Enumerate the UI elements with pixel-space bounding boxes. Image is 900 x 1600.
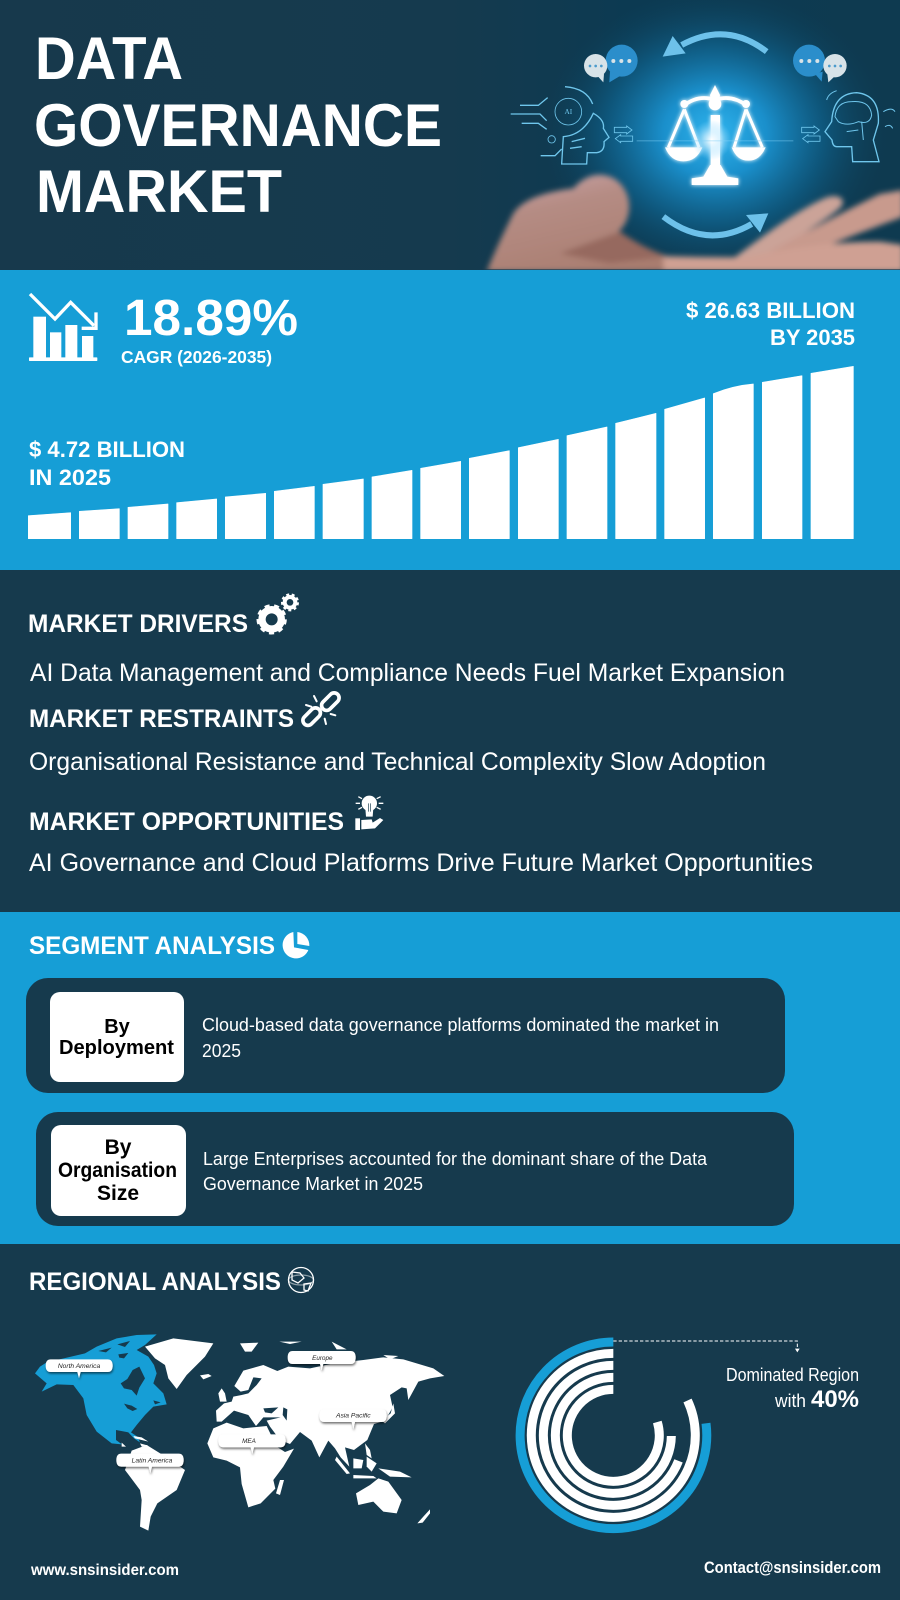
title (34, 25, 442, 225)
card: by organisation size (36, 1112, 794, 1226)
chat bubbles (584, 45, 847, 82)
icon: globe (288, 1268, 314, 1292)
description: Cloud-based data governance platforms dominated the market in (202, 1015, 719, 1035)
label: MEA (218, 1434, 286, 1454)
dominated region callout (726, 1365, 859, 1413)
footer website: www.snsinsider.com (30, 1562, 179, 1579)
Australia (356, 1478, 402, 1513)
scales icon (665, 85, 766, 185)
label box: By (104, 1016, 131, 1038)
islands (122, 1342, 430, 1523)
opportunity text: AI Governance and Cloud Platforms Drive Future Market Opportunities (29, 849, 813, 877)
label box: Deployment (59, 1037, 174, 1059)
description (202, 1015, 719, 1061)
description: Governance Market in 2025 (203, 1174, 423, 1194)
hand (487, 175, 900, 272)
icon: broken chain link (301, 691, 341, 728)
left AI head line art (511, 87, 633, 164)
panel: regional analysis (0, 1244, 900, 1600)
panel: header (0, 0, 900, 280)
label: Asia Pacific (319, 1409, 387, 1429)
end value (686, 298, 855, 350)
icon: bar chart with trend arrow (29, 294, 97, 361)
world map (35, 1334, 444, 1531)
description: 2025 (202, 1041, 241, 1061)
CAGR label: CAGR (2026-2035) (121, 347, 272, 367)
dashed leader line (613, 1341, 800, 1352)
label box: Organisation (58, 1159, 177, 1182)
heading: market drivers: MARKET DRIVERS (28, 610, 248, 638)
radial bar chart (520, 1341, 800, 1529)
card: by deployment (26, 978, 785, 1093)
start value (29, 437, 185, 490)
end value: $ 26.63 BILLION (686, 298, 855, 323)
panel: segment analysis (0, 912, 900, 1244)
heading: market opportunities: MARKET OPPORTUNITIES (29, 808, 344, 836)
Eurasia (216, 1357, 444, 1467)
heading: regional analysis: REGIONAL ANALYSIS (29, 1268, 281, 1296)
Africa (207, 1423, 294, 1507)
label: Asia Pacific: Asia Pacific (335, 1413, 371, 1420)
heading: market restraints: MARKET RESTRAINTS (29, 705, 294, 733)
bar chart (28, 366, 853, 539)
label box (51, 1125, 186, 1216)
icon: pie chart (283, 932, 309, 958)
title: GOVERNANCE (34, 92, 442, 159)
title: MARKET (36, 158, 282, 225)
South America (125, 1445, 185, 1531)
dominated region callout: with (774, 1391, 806, 1411)
panel: market dynamics (0, 570, 900, 912)
icon: hand with light bulb (355, 796, 383, 830)
label: North America (46, 1359, 113, 1378)
end value: BY 2035 (770, 325, 855, 350)
CAGR value: 18.89% (124, 289, 298, 346)
heading: segment analysis: SEGMENT ANALYSIS (29, 932, 275, 960)
label box: By (105, 1136, 132, 1159)
driver text: AI Data Management and Compliance Needs Fuel Market Expansion (30, 659, 785, 687)
label box (50, 992, 184, 1082)
label box: Size (97, 1182, 139, 1205)
description (203, 1149, 708, 1194)
label: North America: North America (58, 1363, 100, 1370)
dominated region callout: Dominated Region (726, 1365, 859, 1385)
header illustration: scales of justice held over a hand (487, 0, 900, 280)
icon: gears (258, 594, 298, 633)
label: Europe: Europe (312, 1355, 333, 1362)
description: Large Enterprises accounted for the dominant share of the Data (203, 1149, 708, 1169)
panel: market size (0, 270, 900, 570)
AI label: AI (564, 107, 573, 116)
circular arrows (663, 34, 768, 235)
dominated region callout: 40% (811, 1386, 859, 1413)
title: DATA (35, 25, 183, 92)
start value: $ 4.72 BILLION (29, 437, 185, 462)
label: Latin America: Latin America (132, 1458, 173, 1465)
label: MEA: MEA (242, 1438, 256, 1445)
restraint text: Organisational Resistance and Technical Complexity Slow Adoption (29, 748, 766, 776)
Greenland (145, 1338, 213, 1389)
label: Latin America (116, 1454, 184, 1473)
North America highlighted (35, 1334, 167, 1447)
label: Europe (288, 1351, 356, 1371)
right brain head line art (802, 91, 895, 162)
start value: IN 2025 (29, 465, 111, 490)
